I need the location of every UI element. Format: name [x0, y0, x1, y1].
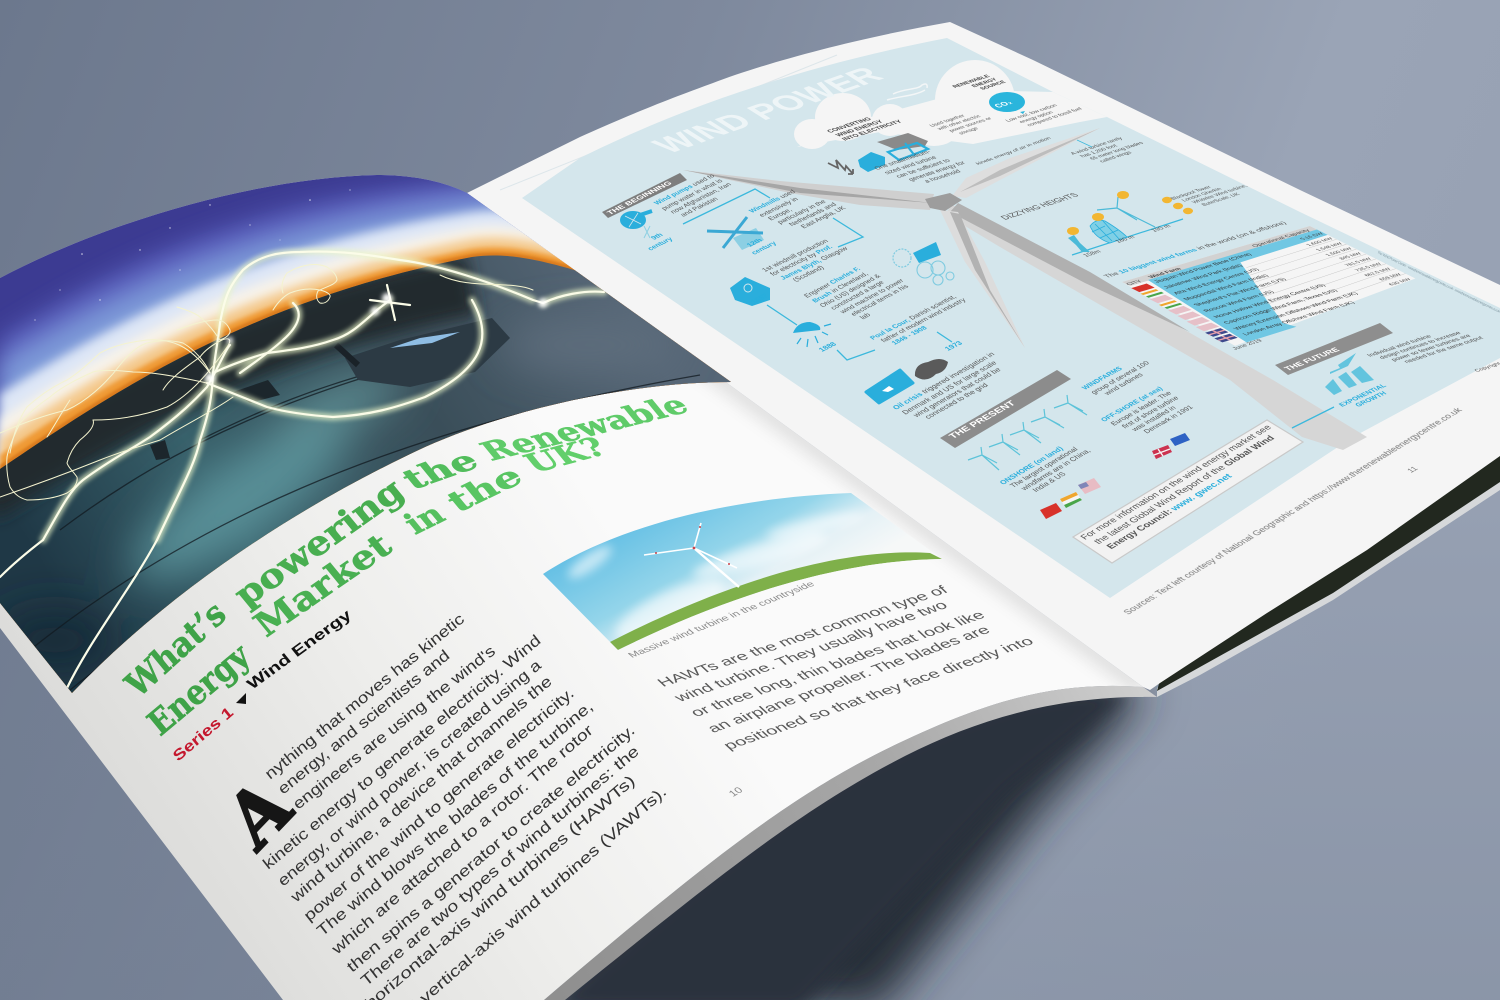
callout: more information: Energy Council: [1104, 506, 1177, 550]
photo caption: Massive wind turbine in the countryside [626, 580, 818, 660]
poul la cour text: father of modern wind industry [880, 297, 968, 344]
windmills text: extensively in [758, 196, 800, 218]
height legend: Blackpool Tower [1170, 185, 1213, 201]
farm names: Horse Hollow Wind Energy Centre (US) [1212, 283, 1328, 319]
turbine graphic [683, 128, 1367, 450]
converting heading: WIND ENERGY [834, 119, 886, 138]
brush text: Charles F. [829, 266, 863, 286]
windmills text: Europe, [767, 207, 794, 222]
label: exponential growth: EXPONENTIAL [1338, 383, 1389, 408]
body text column 2: positioned so that they face directly into [720, 635, 1038, 753]
magazine shadow [544, 688, 1150, 1000]
renewable heading: ENERGY [971, 78, 999, 89]
oil crisis text: connected to the grid [923, 381, 990, 420]
stars [34, 189, 351, 321]
windfarms text: WINDFARMS [1081, 366, 1125, 391]
farm names: Jiuquan Wind Power Base (China) [1152, 252, 1254, 284]
onshore text: The largest operational [1008, 445, 1080, 489]
banner: the beginning: THE BEGINNING [606, 180, 674, 216]
height labels: 158m [1082, 249, 1103, 258]
converting note: can be sufficient to [895, 158, 953, 179]
farm names: London Array Offshore Wind Farm (UK) [1241, 301, 1357, 336]
brush text: Engineer [803, 281, 834, 299]
farm names [1142, 247, 1370, 336]
turbine note: has 1,200 foot [1079, 144, 1120, 159]
offshore text: OFF-SHORE (at sea) [1100, 386, 1165, 423]
article title: Energy [140, 635, 259, 744]
wind pumps text: and Pakistan [679, 196, 720, 218]
icon: house [858, 152, 885, 172]
windmills text: East Anglia, UK [800, 205, 848, 230]
icon: generator box [877, 133, 928, 160]
magazine cover edge [1157, 452, 1500, 697]
name column highlight [1131, 230, 1432, 342]
first production text: Prof. [815, 244, 835, 255]
height labels: 180 m [1114, 235, 1137, 244]
article title: powering [226, 471, 412, 615]
body text column 1: power of the wind to generate electricity. [301, 684, 577, 925]
capacities: 735.5 MW [1354, 262, 1384, 272]
poul la cour text: Danish scientist, [906, 294, 958, 322]
left page edge thickness [544, 686, 1157, 1000]
article title: the [394, 444, 486, 496]
flags [1120, 284, 1249, 342]
body text column 1: The wind blows the blades of the turbine, [314, 698, 596, 940]
offshore text: Europe is leader. The [1110, 390, 1173, 427]
future text: Individual wind turbine [1366, 334, 1434, 358]
brush text: constructed a large [830, 280, 886, 311]
series label [169, 606, 355, 765]
offshore text: first of shore turbine [1121, 395, 1181, 430]
icons: sun, box, gears [893, 242, 954, 285]
label: 1888: 1888 [816, 340, 839, 353]
body text column 2: HAWTs are the most common type of [654, 584, 952, 689]
banner: the beginning [602, 173, 687, 218]
renewable notes: with other electric [935, 114, 983, 132]
first production text: (Scotland) [792, 265, 826, 283]
renewable heading: RENEWABLE [952, 74, 992, 89]
farm names: Capricorn Ridge Wind Farm, Texas (US) [1222, 289, 1340, 325]
converting note: One small/medium- [873, 149, 933, 171]
connector [1292, 407, 1334, 428]
icon: exponential growth [1325, 353, 1374, 395]
article title: in [396, 497, 452, 541]
body text column 2: wind turbine. They usually have two [670, 599, 952, 705]
windmills text: particularly in the [776, 199, 828, 225]
hero photo: light trails over car at dusk [0, 175, 731, 693]
renewable notes: power sources or [948, 117, 994, 133]
icon: lightning [828, 160, 853, 174]
farm names: Roscoe Wind Farm (US) [1202, 290, 1276, 313]
height legend: Bute/Scale, UK [1201, 192, 1242, 207]
article title: What’s [118, 593, 234, 706]
capacities: 845 MW [1338, 252, 1364, 261]
body text column 1: energy, and scientists and [275, 647, 453, 798]
oil crisis text: triggered investigation in [918, 350, 997, 396]
series label: Wind Energy [243, 606, 355, 693]
table date: June 2019 [1231, 338, 1265, 351]
clouds [564, 510, 858, 638]
renewable notes: Used together [929, 114, 967, 128]
heights chart [1067, 177, 1256, 258]
blade: upper right [952, 128, 1100, 198]
callout: more information: www. gwec.net [1167, 472, 1234, 513]
light trail glow [43, 252, 604, 540]
renewable notes: compared to fossil fuel [1026, 107, 1084, 128]
page number 10: 10 [726, 785, 746, 799]
icon: lamp [793, 322, 831, 347]
blade markings [655, 526, 730, 565]
table title: The 10 biggest wind farms in the world (on & offshore) [1103, 221, 1289, 279]
table body [1112, 226, 1432, 346]
drop cap: A [211, 760, 308, 868]
banner: the future [1275, 323, 1393, 375]
onshore text: India & US [1030, 470, 1068, 494]
first production text: 1st windmill production [761, 239, 830, 273]
blade: left [683, 170, 934, 210]
icon: windmill [707, 217, 764, 250]
brush text: lab [859, 312, 873, 321]
onshore text: ONSHORE (on land) [997, 445, 1066, 486]
article title: Renewable [474, 390, 696, 467]
banner: the present [940, 370, 1071, 448]
future text: needed for the same output [1403, 336, 1485, 364]
title: wind power: WIND POWER [644, 62, 891, 158]
body text column 1: energy, or wind power, is created using a [275, 656, 545, 890]
oil crisis text: Oil crisis [890, 391, 925, 411]
converting note: generate energy for [907, 160, 968, 182]
article title [118, 390, 696, 744]
header labels [1124, 228, 1314, 286]
capacities: 630 MW [1388, 278, 1414, 286]
brush text: Ohio (US) designed & [819, 273, 883, 309]
wind farm table [1109, 226, 1432, 347]
converting heading: INTO ELECTRICITY [841, 119, 905, 142]
farm names: Shepherd's Flat Wind Farm (US) [1192, 277, 1288, 307]
wind pumps text: used to [689, 173, 717, 188]
height legend [1162, 177, 1256, 214]
converting note: sized wind turbine [883, 155, 939, 176]
capacities: 5.16 GW [1299, 232, 1326, 241]
thin light trails [0, 265, 533, 500]
body text column 2 [654, 584, 1038, 753]
label: 9th century: century [646, 236, 675, 252]
oil crisis text: wind generators that could be [910, 366, 1003, 419]
panel background [522, 38, 1500, 598]
height legend: Whitelee Wind turbine, [1191, 184, 1250, 205]
infographic panel [522, 38, 1500, 598]
small photo: wind turbine in the countryside [543, 493, 942, 650]
brush text: wind machine to power [838, 278, 906, 315]
brush text: electrical items in his [850, 283, 911, 317]
turbine note: A wind turbine rarely [1070, 137, 1125, 156]
body text column 2: an airplane propeller. The blades are [704, 624, 994, 736]
farm names: Muppandal Wind Farm (India) [1182, 274, 1271, 301]
sources line: Sources: Text left courtesy of National Geographic and https://www.therenewableenergycentre.co.uk [1120, 405, 1464, 616]
timeline connector [683, 189, 952, 360]
icon: wind swoosh [887, 84, 927, 100]
article title: the [439, 459, 530, 519]
wind pumps text: now Afghanistan, Iran [669, 182, 733, 215]
oil crisis text: Denmark and US for large scale [900, 359, 999, 416]
callout: more information: For more information on the wind energy market see [1077, 423, 1273, 541]
icon: wind pump [620, 211, 652, 238]
renewable notes: Low cost, low carbon [1005, 104, 1059, 123]
banner: the future: THE FUTURE [1282, 346, 1342, 372]
brush text: in Cleveland, [828, 271, 870, 295]
icon: blackpool tower [1068, 235, 1090, 252]
callout: more information: Global Wind [1221, 433, 1277, 468]
capacities [1294, 232, 1417, 288]
capacities: 659 MW [1378, 273, 1404, 282]
height labels [1082, 224, 1173, 258]
windfarms text: wind turbines [1102, 372, 1145, 397]
windfarms text: group of several 100 [1090, 360, 1151, 396]
spine shading [704, 382, 1142, 687]
label: 12th century: century [750, 241, 778, 256]
renewable notes [929, 99, 1084, 139]
capacities: 781.5 MW [1344, 257, 1374, 267]
farm names: Walney Extension Offshore Wind Farm (UK) [1232, 291, 1360, 331]
left page [0, 175, 1143, 1000]
converting note: a household [923, 169, 963, 184]
kinetic note: kinetic energy of air in motion [975, 136, 1053, 166]
onshore turbine icons [968, 395, 1087, 470]
tower [945, 205, 1367, 450]
poul la cour text: 1846 - 1908 [891, 325, 929, 346]
first production text: James Blyth, [779, 258, 824, 281]
hub [925, 193, 962, 211]
height labels: 195 m [1150, 224, 1173, 233]
icon: oil drum and spill [866, 359, 948, 403]
height legend: London Gherkin [1181, 187, 1224, 203]
body text column 2: or three long, thin blades that look like [687, 609, 989, 720]
body text column 1: There are two types of wind turbines: the [358, 742, 642, 990]
table header [1122, 226, 1318, 286]
converting heading: CONVERTING [826, 117, 873, 134]
label: 12th century: 12th [746, 238, 764, 248]
right page thin margin rule [500, 55, 837, 190]
light trail flares [205, 293, 548, 383]
capacities: 662.5 MW [1363, 267, 1394, 277]
callout: more information: the latest Global Wind Report of the [1091, 462, 1230, 546]
flags: china, india, usa [1040, 478, 1101, 519]
wind pumps text: Wind pumps [653, 184, 695, 206]
body text column 1 [260, 610, 670, 1000]
icon: CO2 cloud [989, 92, 1025, 114]
first production text: Glasgow [818, 246, 851, 263]
future text: design continues to increase [1378, 331, 1463, 360]
poul la cour text: Poul la Cour, [869, 318, 912, 341]
renewable notes: storage [958, 127, 980, 136]
body text column 1: wind turbine, a device that channels the [287, 672, 555, 907]
windmills text: Windmills [748, 196, 783, 214]
body text column 1: kinetic energy to generate electricity. Wind [260, 632, 544, 873]
credit strip: The Wind Power Centre · www.therenewableenergycentre.co.uk · www.therenewableenergycentre.co.uk [1377, 250, 1500, 314]
label: 1887: 1887 [748, 292, 771, 305]
renewable heading: SOURCE [979, 80, 1008, 91]
body text column 1: nything that moves has kinetic [262, 610, 468, 783]
light trails [0, 252, 604, 690]
turbine note: called wings [1099, 151, 1134, 164]
icon: gherkin [1090, 220, 1127, 243]
grass [608, 552, 942, 650]
brush text: Brush [811, 291, 834, 304]
farm names: Jaisalmer Wind Park (India) [1162, 264, 1245, 290]
capacities: 1,600 MW [1305, 237, 1336, 247]
dizzying heights heading: DIZZYING HEIGHTS [998, 191, 1081, 221]
blade: lower [940, 210, 1025, 348]
farm names: Alta Wind Energy Centre (US) [1172, 268, 1261, 295]
label: 9th century: 9th [650, 232, 665, 241]
icon: house [730, 277, 770, 306]
ground [0, 256, 731, 693]
page number 11: 11 [1405, 465, 1420, 474]
badges [1067, 191, 1129, 235]
body text column 1: engineers are using the wind's [290, 642, 499, 813]
capacities: 1,548 MW [1315, 242, 1345, 252]
label: 1973: 1973 [942, 339, 965, 352]
body text column 1: which are attached to a rotor. The rotor [328, 721, 597, 959]
clouds [794, 60, 1107, 149]
header labels: Operational Capacity [1250, 228, 1313, 248]
note connector [1077, 140, 1092, 147]
body text column 1: then spins a generator to create electricity. [344, 721, 638, 976]
windmills text: Netherlands and [788, 202, 839, 228]
article title: Market [246, 525, 400, 645]
header labels: Wind Farm [1147, 267, 1184, 279]
car silhouette [150, 318, 510, 460]
wind pumps text: pump water in what is [660, 178, 725, 212]
renewable notes: energy option [1018, 111, 1055, 124]
first production text: for electricity by [769, 251, 820, 277]
icon: tall turbine [1097, 197, 1155, 227]
icon: CO2 cloud: CO₂ [992, 99, 1015, 109]
future text: power so fewer turbines are [1390, 333, 1473, 362]
series label: Series 1 [169, 703, 237, 765]
flags: denmark, europe [1152, 433, 1190, 459]
offshore text: Denmark in 1991 [1143, 405, 1195, 435]
label: exponential growth: GROWTH [1354, 391, 1389, 408]
header labels: CITY [1125, 279, 1144, 286]
turbine [644, 523, 739, 587]
sky [0, 175, 731, 693]
onshore text: windfarms are in China, [1018, 447, 1093, 492]
banner: the present: THE PRESENT [947, 399, 1018, 440]
capacities: 1,500 MW [1324, 247, 1355, 257]
turbine note: 65 meter long blades [1089, 141, 1145, 161]
windmills text: used [777, 189, 798, 200]
article title: UK? [518, 432, 614, 479]
right page [467, 22, 1500, 690]
offshore text: was installed in [1130, 405, 1178, 433]
